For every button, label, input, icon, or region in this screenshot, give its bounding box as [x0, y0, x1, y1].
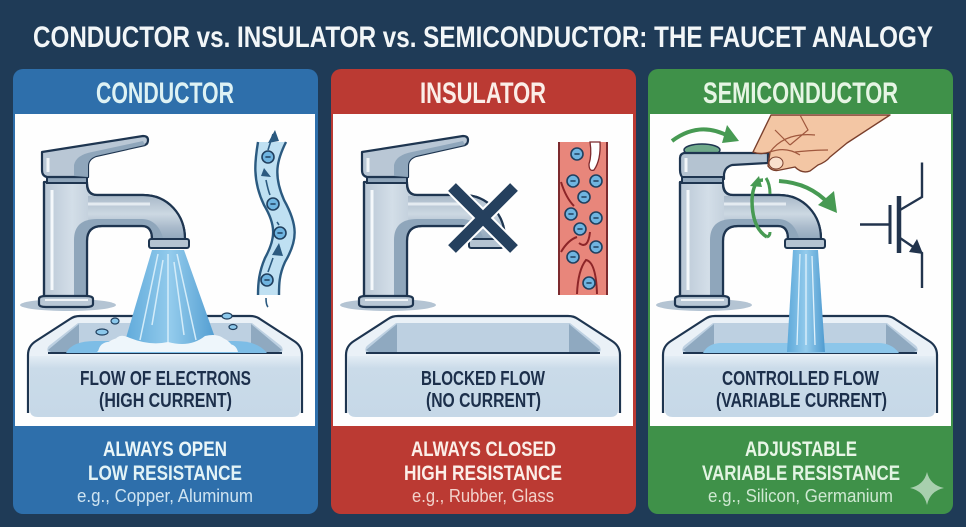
- icon: electron flow in wire: [255, 130, 295, 307]
- sink: semiconductor: [663, 316, 937, 417]
- arrow: lever motion right: [779, 181, 837, 213]
- footer text: semiconductor: [702, 437, 900, 506]
- icon: transistor symbol: [860, 162, 923, 288]
- icon: faucet closed: [340, 136, 505, 311]
- icon: X blocked: [452, 187, 514, 249]
- sink label: conductor: FLOW OF ELECTRONS: [80, 368, 251, 390]
- icon: faucet: [20, 136, 189, 311]
- panel: insulator: [331, 69, 636, 514]
- sink: conductor: [28, 316, 302, 417]
- footer text: conductor: ALWAYS OPEN: [103, 437, 227, 461]
- sink: insulator: [346, 316, 620, 417]
- footer text: semiconductor: VARIABLE RESISTANCE: [702, 461, 900, 485]
- sink label: insulator: [421, 368, 545, 412]
- arrow: rotation around spout: [750, 176, 770, 237]
- icon: hand on lever: [753, 115, 890, 172]
- icon: faucet with lever: [656, 177, 821, 311]
- sink label: conductor: (HIGH CURRENT): [99, 390, 232, 412]
- sink label: semiconductor: CONTROLLED FLOW: [722, 368, 879, 390]
- panel: semiconductor: [648, 69, 953, 514]
- panel: conductor: [13, 69, 318, 514]
- footer text: conductor: [77, 437, 253, 506]
- arrow: lever motion top: [672, 125, 739, 143]
- sink label: semiconductor: [716, 368, 887, 412]
- footer text: semiconductor: e.g., Silicon, Germanium: [708, 486, 893, 506]
- footer text: insulator: HIGH RESISTANCE: [404, 461, 562, 485]
- footer text: conductor: e.g., Copper, Aluminum: [77, 486, 253, 506]
- sink label: insulator: BLOCKED FLOW: [421, 368, 545, 390]
- sink label: semiconductor: (VARIABLE CURRENT): [716, 390, 887, 412]
- footer text: insulator: e.g., Rubber, Glass: [412, 486, 554, 506]
- icon: faucet handle: [680, 144, 825, 248]
- icon: sparkle: [910, 472, 944, 505]
- water stream: controlled flow: [787, 250, 825, 352]
- footer text: insulator: ALWAYS CLOSED: [411, 437, 556, 461]
- sink label: conductor: [80, 368, 251, 412]
- heading: conductor: CONDUCTOR: [96, 77, 234, 110]
- footer text: insulator: [404, 437, 562, 506]
- heading: semiconductor: SEMICONDUCTOR: [703, 77, 898, 110]
- water stream: high flow: [96, 250, 238, 352]
- footer text: conductor: LOW RESISTANCE: [88, 461, 242, 485]
- icon: insulator material with trapped electrons: [559, 142, 607, 295]
- sink label: insulator: (NO CURRENT): [426, 390, 541, 412]
- heading: insulator: INSULATOR: [420, 77, 546, 110]
- footer text: semiconductor: ADJUSTABLE: [745, 437, 857, 461]
